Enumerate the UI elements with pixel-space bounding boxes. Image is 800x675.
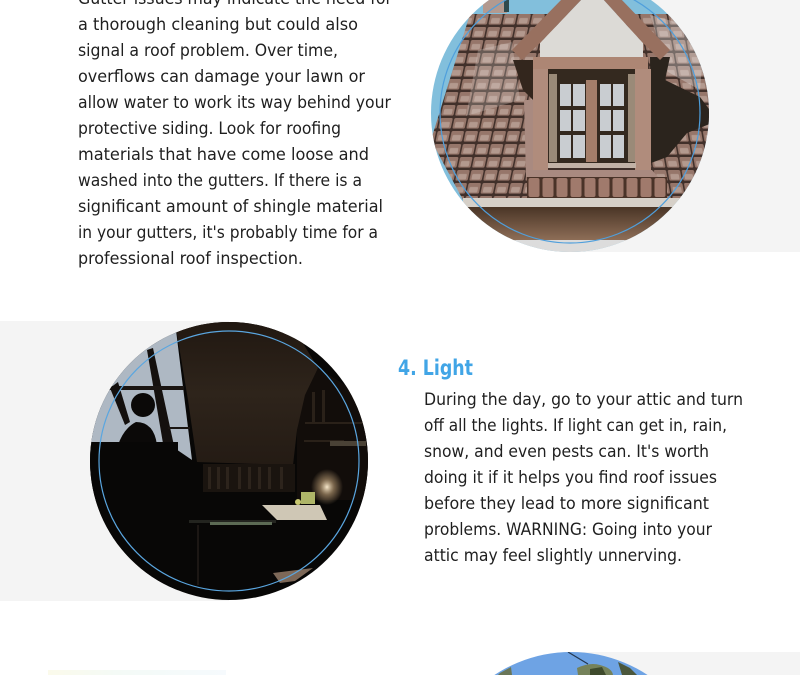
text block: gutter issues: significant amount of shingle material xyxy=(78,196,383,216)
silhouette xyxy=(131,393,155,417)
desk xyxy=(262,505,327,520)
bookshelf back xyxy=(203,464,295,492)
bottom tile row xyxy=(527,177,667,198)
left roof tiles xyxy=(431,14,600,200)
window frame xyxy=(533,57,648,69)
green book xyxy=(301,492,315,504)
text block: light: doing it if it helps you find roof issues xyxy=(424,467,717,487)
wall below eave xyxy=(514,240,626,252)
ring: attic photo xyxy=(99,331,359,591)
text block: gutter issues: professional roof inspection. xyxy=(78,248,303,268)
text block: gutter issues: allow water to work its way behind your xyxy=(78,92,391,112)
gutter xyxy=(463,198,680,207)
text block: light: before they lead to more significant xyxy=(424,493,709,513)
attic wall xyxy=(175,322,318,465)
text block: light: During the day, go to your attic and turn xyxy=(424,389,743,409)
text block: gutter issues: in your gutters, it's probably time for a xyxy=(78,222,378,242)
text block: light: problems. WARNING: Going into your xyxy=(424,519,712,539)
shadow right of dormer xyxy=(650,57,712,163)
bottom right light xyxy=(273,568,313,583)
text block: gutter issues: materials that have come loose and xyxy=(78,144,369,164)
text block: light: off all the lights. If light can get in, rain, xyxy=(424,415,727,435)
heading: 4. Light: 4. Light xyxy=(398,356,473,380)
text block: gutter issues: a thorough cleaning but could also xyxy=(78,14,358,34)
panel: gray background behind tree photo xyxy=(571,652,800,675)
gable xyxy=(540,0,643,57)
eave xyxy=(463,207,680,241)
gable trim xyxy=(512,0,583,60)
chimney xyxy=(483,0,507,13)
panes xyxy=(560,84,624,158)
text block: gutter issues: protective siding. Look for roofing xyxy=(78,118,341,138)
right bookshelves xyxy=(297,368,369,500)
text block: gutter issues: signal a roof problem. Over time, xyxy=(78,40,338,60)
shadow left of dormer xyxy=(513,60,533,100)
text block: light xyxy=(424,389,743,565)
image: roof dormer photo xyxy=(431,0,720,255)
right roof tiles xyxy=(600,14,720,200)
chair back xyxy=(189,520,276,523)
text block: gutter issues: washed into the gutters. If there is a xyxy=(78,170,362,190)
text block: gutter issues: overflows can damage your lawn or xyxy=(78,66,365,86)
text block: light: attic may feel slightly unnerving. xyxy=(424,545,682,565)
wall beside window xyxy=(524,100,658,177)
window frame bars xyxy=(147,348,174,442)
lamp glow xyxy=(311,469,343,505)
panel: gray band behind attic photo xyxy=(0,321,229,601)
image: tree and sky photo xyxy=(494,652,648,675)
skylight xyxy=(90,322,192,460)
panel: gray background behind roof photo xyxy=(570,0,800,252)
ring: roof photo xyxy=(440,0,700,243)
text block: gutter issues xyxy=(78,0,392,268)
faint heading fragment xyxy=(48,670,226,675)
image: dark attic photo xyxy=(90,322,369,612)
sky xyxy=(431,0,710,252)
text block: light: snow, and even pests can. It's worth xyxy=(424,441,709,461)
light patch on tiles xyxy=(466,42,520,116)
